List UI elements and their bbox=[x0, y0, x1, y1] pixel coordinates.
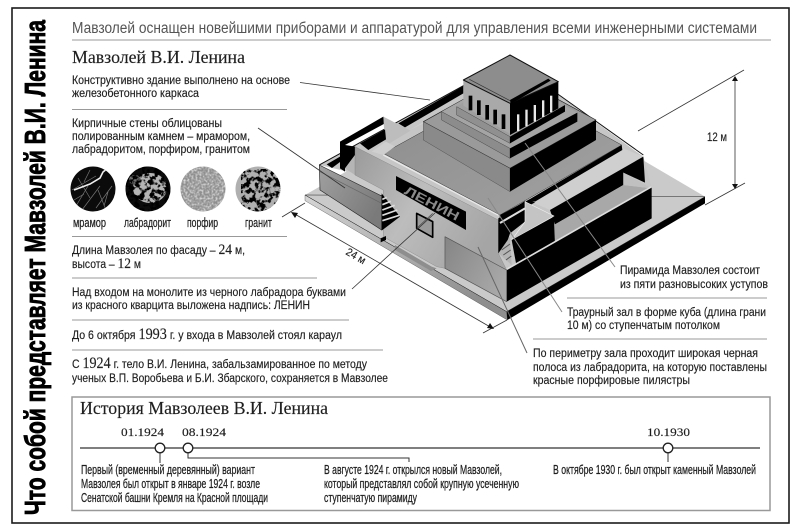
text block: walls: полированным камнем – мрамором, bbox=[72, 131, 250, 143]
text block: frame bbox=[72, 75, 290, 100]
event: 01.1924: Сенатской башни Кремля на Красной площади bbox=[81, 490, 268, 505]
leader: walls bbox=[258, 128, 345, 188]
event: 08.1924: В августе 1924 г. открылся новый Мавзолей, bbox=[324, 462, 502, 477]
callout: mourning hall bbox=[567, 307, 766, 332]
stone labels: лабрадорит bbox=[124, 215, 171, 230]
plaque: ЛЕНИН bbox=[402, 184, 462, 224]
mausoleum illustration bbox=[305, 55, 705, 320]
front left wall bbox=[319, 165, 382, 230]
dimension: 12 m bbox=[638, 70, 745, 205]
dimension: 24 m bbox=[282, 203, 507, 333]
event: 01.1924: 01.1924 bbox=[121, 425, 164, 439]
leader: frame bbox=[300, 82, 430, 100]
panel: history timeline bbox=[72, 397, 770, 510]
upper flat terrace bbox=[383, 83, 622, 222]
facade bbox=[355, 147, 507, 270]
timeline axis bbox=[80, 447, 760, 449]
event: 10.1930 bbox=[553, 425, 756, 477]
text block: dimensions: Длина Мавзолея по фасаду – 24 м, bbox=[72, 242, 245, 258]
leader: inscription bbox=[352, 213, 435, 289]
callout: pyramid steps: из пяти разновысоких уступов bbox=[620, 279, 768, 291]
rear right wall bbox=[528, 148, 645, 224]
event: 08.1924: ступенчатую пирамиду bbox=[324, 490, 417, 505]
terrace bbox=[319, 60, 652, 270]
text block: dimensions: высота – 12 м bbox=[72, 256, 141, 272]
text block: guard: До 6 октября 1993 г. у входа в Мавзолей стоял караул bbox=[72, 326, 342, 343]
callout: labradorite strip: По периметру зала проходит широкая черная bbox=[533, 348, 758, 360]
leader: hall bbox=[488, 198, 562, 312]
front right wall bbox=[445, 237, 507, 302]
text block: inscription: из красного кварцита выложена надпись: ЛЕНИН bbox=[72, 300, 310, 312]
dimension: 24 m: 24 м bbox=[344, 246, 368, 267]
stone labels: мрамор bbox=[73, 215, 106, 230]
event: 08.1924 bbox=[182, 425, 519, 505]
event: 08.1924: который представлял собой крупную усеченную bbox=[324, 476, 519, 491]
right gray inner wall bbox=[512, 173, 652, 267]
lower black wall bbox=[507, 187, 652, 302]
text block: walls bbox=[72, 118, 250, 156]
event: 01.1924: Первый (временный деревянный) вариант bbox=[81, 462, 255, 477]
event: 01.1924 bbox=[81, 425, 268, 505]
stone labels bbox=[73, 215, 272, 230]
callout: mourning hall: 10 м) со ступенчатым потолком bbox=[567, 320, 720, 332]
event: 08.1924: 08.1924 bbox=[182, 425, 226, 439]
dimension: 12 m: 12 м bbox=[707, 132, 727, 144]
text block: embalming bbox=[72, 355, 388, 385]
text block: inscription bbox=[72, 287, 346, 312]
timeline heading: История Мавзолеев В.И. Ленина bbox=[80, 398, 328, 418]
stone labels: порфир bbox=[187, 215, 218, 230]
pyramid step 4 bbox=[423, 73, 596, 192]
left pilasters bbox=[469, 96, 505, 129]
text block: frame: железобетонного каркаса bbox=[72, 88, 200, 100]
small black block bbox=[381, 236, 386, 242]
rear left wall bbox=[327, 86, 463, 168]
door bbox=[417, 213, 433, 237]
right tribune bbox=[498, 201, 554, 265]
left stairs bbox=[382, 193, 400, 231]
text block: frame: Конструктивно здание выполнено на основе bbox=[72, 75, 290, 87]
text block: walls: лабрадоритом, порфиром, гранитом bbox=[72, 144, 250, 156]
leader: pyramid bbox=[525, 143, 615, 267]
icon: porphyry sample bbox=[180, 166, 226, 212]
callout: labradorite strip: полоса из лабрадорита, на которую поставлены bbox=[533, 362, 767, 374]
left tribune bbox=[340, 117, 411, 175]
icon: labradorite sample bbox=[125, 166, 171, 212]
floor strip bbox=[395, 245, 437, 271]
text block: walls: Кирпичные стены облицованы bbox=[72, 118, 222, 130]
plate bbox=[305, 80, 705, 320]
event: 10.1930: 10.1930 bbox=[647, 425, 690, 439]
event: 01.1924: Мавзолея был открыт в январе 1924 г. возле bbox=[81, 476, 260, 491]
callout: labradorite strip: красные порфировые пилястры bbox=[533, 375, 690, 387]
heading: Mausoleum: Мавзолей В.И. Ленина bbox=[72, 47, 245, 67]
callout: mourning hall: Траурный зал в форме куба (длина грани bbox=[567, 307, 766, 319]
top cube bbox=[463, 55, 558, 135]
pyramid step 3 bbox=[442, 73, 577, 158]
callout: labradorite strip bbox=[533, 348, 767, 387]
icon: granite sample bbox=[236, 166, 280, 212]
plaque bbox=[396, 176, 466, 230]
stone labels: гранит bbox=[245, 215, 272, 230]
text block: dimensions bbox=[72, 242, 245, 272]
leader: strip bbox=[478, 247, 527, 353]
facade top ridge bbox=[383, 155, 500, 216]
text block: embalming: ученых В.П. Воробьева и Б.И. Збарского, сохраняется в Мавзолее bbox=[72, 373, 388, 385]
callout: pyramid steps: Пирамида Мавзолея состоит bbox=[620, 265, 761, 277]
text block: embalming: С 1924 г. тело В.И. Ленина, забальзамированное по методу bbox=[72, 355, 367, 372]
callout: pyramid steps bbox=[620, 265, 768, 291]
text block: inscription: Над входом на монолите из черного лабрадора буквами bbox=[72, 287, 346, 299]
right pilasters bbox=[517, 96, 552, 131]
outer back edge bbox=[319, 60, 643, 165]
icon: marble sample bbox=[70, 166, 116, 212]
pyramid step 2 bbox=[457, 73, 565, 143]
